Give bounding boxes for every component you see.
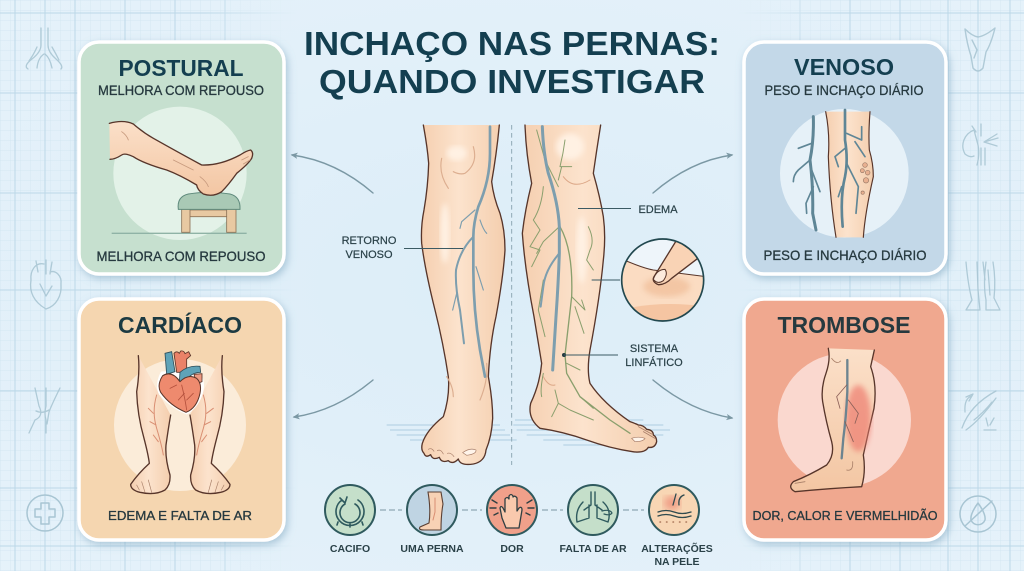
label: sistema linfatico: SISTEMA [630,343,679,355]
label: retorno venoso: RETORNO [342,235,397,247]
illustration: varicose veins [780,109,909,238]
arrow: to trombose [653,380,732,418]
label: uma perna: UMA PERNA [400,543,464,555]
central illustration: legs [387,125,670,465]
inset: pitting test [592,239,707,327]
label: retorno venoso [342,235,463,261]
icon: alteracoes na pele [649,485,699,535]
icon: dor [487,485,537,535]
label: dor: DOR [500,543,524,555]
background icon: medical cross [27,495,63,531]
label: alteracoes na pele: NA PELE [654,556,700,568]
subtitle: venoso: PESO E INCHAÇO DIÁRIO [764,82,924,98]
background icon: pelvis vein [965,28,995,71]
label: sistema linfatico: LINFÁTICO [625,356,683,369]
icon: cacifo [325,485,375,535]
caption: postural: MELHORA COM REPOUSO [96,248,266,264]
subtitle: postural: MELHORA COM REPOUSO [98,82,264,98]
left leg veins [453,127,490,377]
heading: trombose: TROMBOSE [778,312,910,338]
arrow: to postural [292,155,373,193]
label: edema [578,204,678,216]
right leg [522,125,657,452]
background icon: knee [29,388,60,433]
label: falta de ar: FALTA DE AR [559,543,627,555]
left leg [421,125,505,464]
background icon: veins [26,28,62,69]
icon: uma perna [407,485,457,535]
illustration: legs and heart [114,351,246,494]
label: alteracoes na pele: ALTERAÇÕES [641,542,713,555]
icon: falta de ar [568,485,618,535]
background icon: vein with clot [962,391,996,430]
title: QUANDO INVESTIGAR [319,63,705,100]
heading: cardiaco: CARDÍACO [118,311,242,338]
symptom row [325,485,713,568]
right leg lymphatics [530,127,630,433]
background icon: heart vessels [963,124,998,165]
illustration: leg with thrombosis [778,348,911,492]
background icon: heart [31,260,61,309]
label: cacifo: CACIFO [330,543,370,555]
label: sistema linfatico [562,343,683,369]
panel: venoso [744,42,946,274]
title [304,25,720,100]
label: retorno venoso: VENOSO [345,249,393,261]
panel: postural [79,42,284,274]
panel: trombose [744,299,946,540]
label: edema: EDEMA [638,204,678,216]
title: INCHAÇO NAS PERNAS: [304,25,720,62]
arrow: to cardiaco [294,380,373,417]
background icon: legs [966,262,1000,310]
arrow: to venoso [653,155,732,193]
heading: postural: POSTURAL [118,55,244,81]
caption: venoso: PESO E INCHAÇO DIÁRIO [764,247,927,263]
caption: trombose: DOR, CALOR E VERMELHIDÃO [752,508,938,523]
background icon: water drop [960,496,996,532]
illustration: elevated leg on stool [109,107,253,240]
heading: venoso: VENOSO [794,54,894,80]
caption: cardiaco: EDEMA E FALTA DE AR [108,508,252,523]
panel: cardiaco [79,299,284,540]
label: alteracoes na pele [641,542,713,568]
